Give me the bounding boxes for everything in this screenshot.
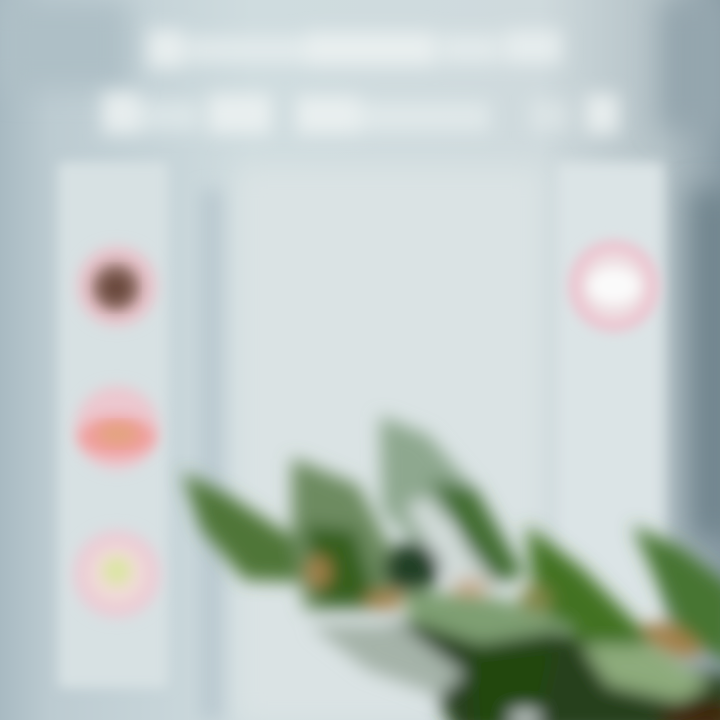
icon: pale yellow spot (73, 530, 161, 618)
title line 1 (148, 30, 562, 68)
pale leaf band (405, 590, 575, 644)
leaf: dark centre (384, 542, 440, 594)
icon: inflamed red patch (75, 386, 159, 470)
leaf: top right (430, 480, 525, 585)
leaf: second (292, 458, 395, 610)
title line 2 (102, 92, 619, 134)
leaf: second core (305, 525, 378, 605)
leaf: far right (632, 525, 720, 665)
title (102, 30, 619, 134)
panel: centre (235, 165, 545, 720)
green lower core (470, 648, 555, 720)
twig highlights (306, 556, 705, 664)
panel: right column (556, 162, 664, 632)
leaf: top pale (380, 416, 475, 548)
pale needle (406, 498, 496, 604)
pine branch (182, 416, 720, 720)
small pale spot at bottom (509, 711, 541, 720)
leaf: far left (182, 472, 305, 582)
leaf: right (526, 525, 655, 652)
pale leaf lower right (582, 645, 710, 702)
dark lower branch (390, 622, 720, 720)
panel: left column (58, 162, 168, 688)
brown lower right (660, 700, 720, 720)
icon: pale pink circle (568, 240, 660, 332)
icon: dark brown spot (77, 246, 157, 326)
pale grey needles lower left (310, 625, 465, 696)
